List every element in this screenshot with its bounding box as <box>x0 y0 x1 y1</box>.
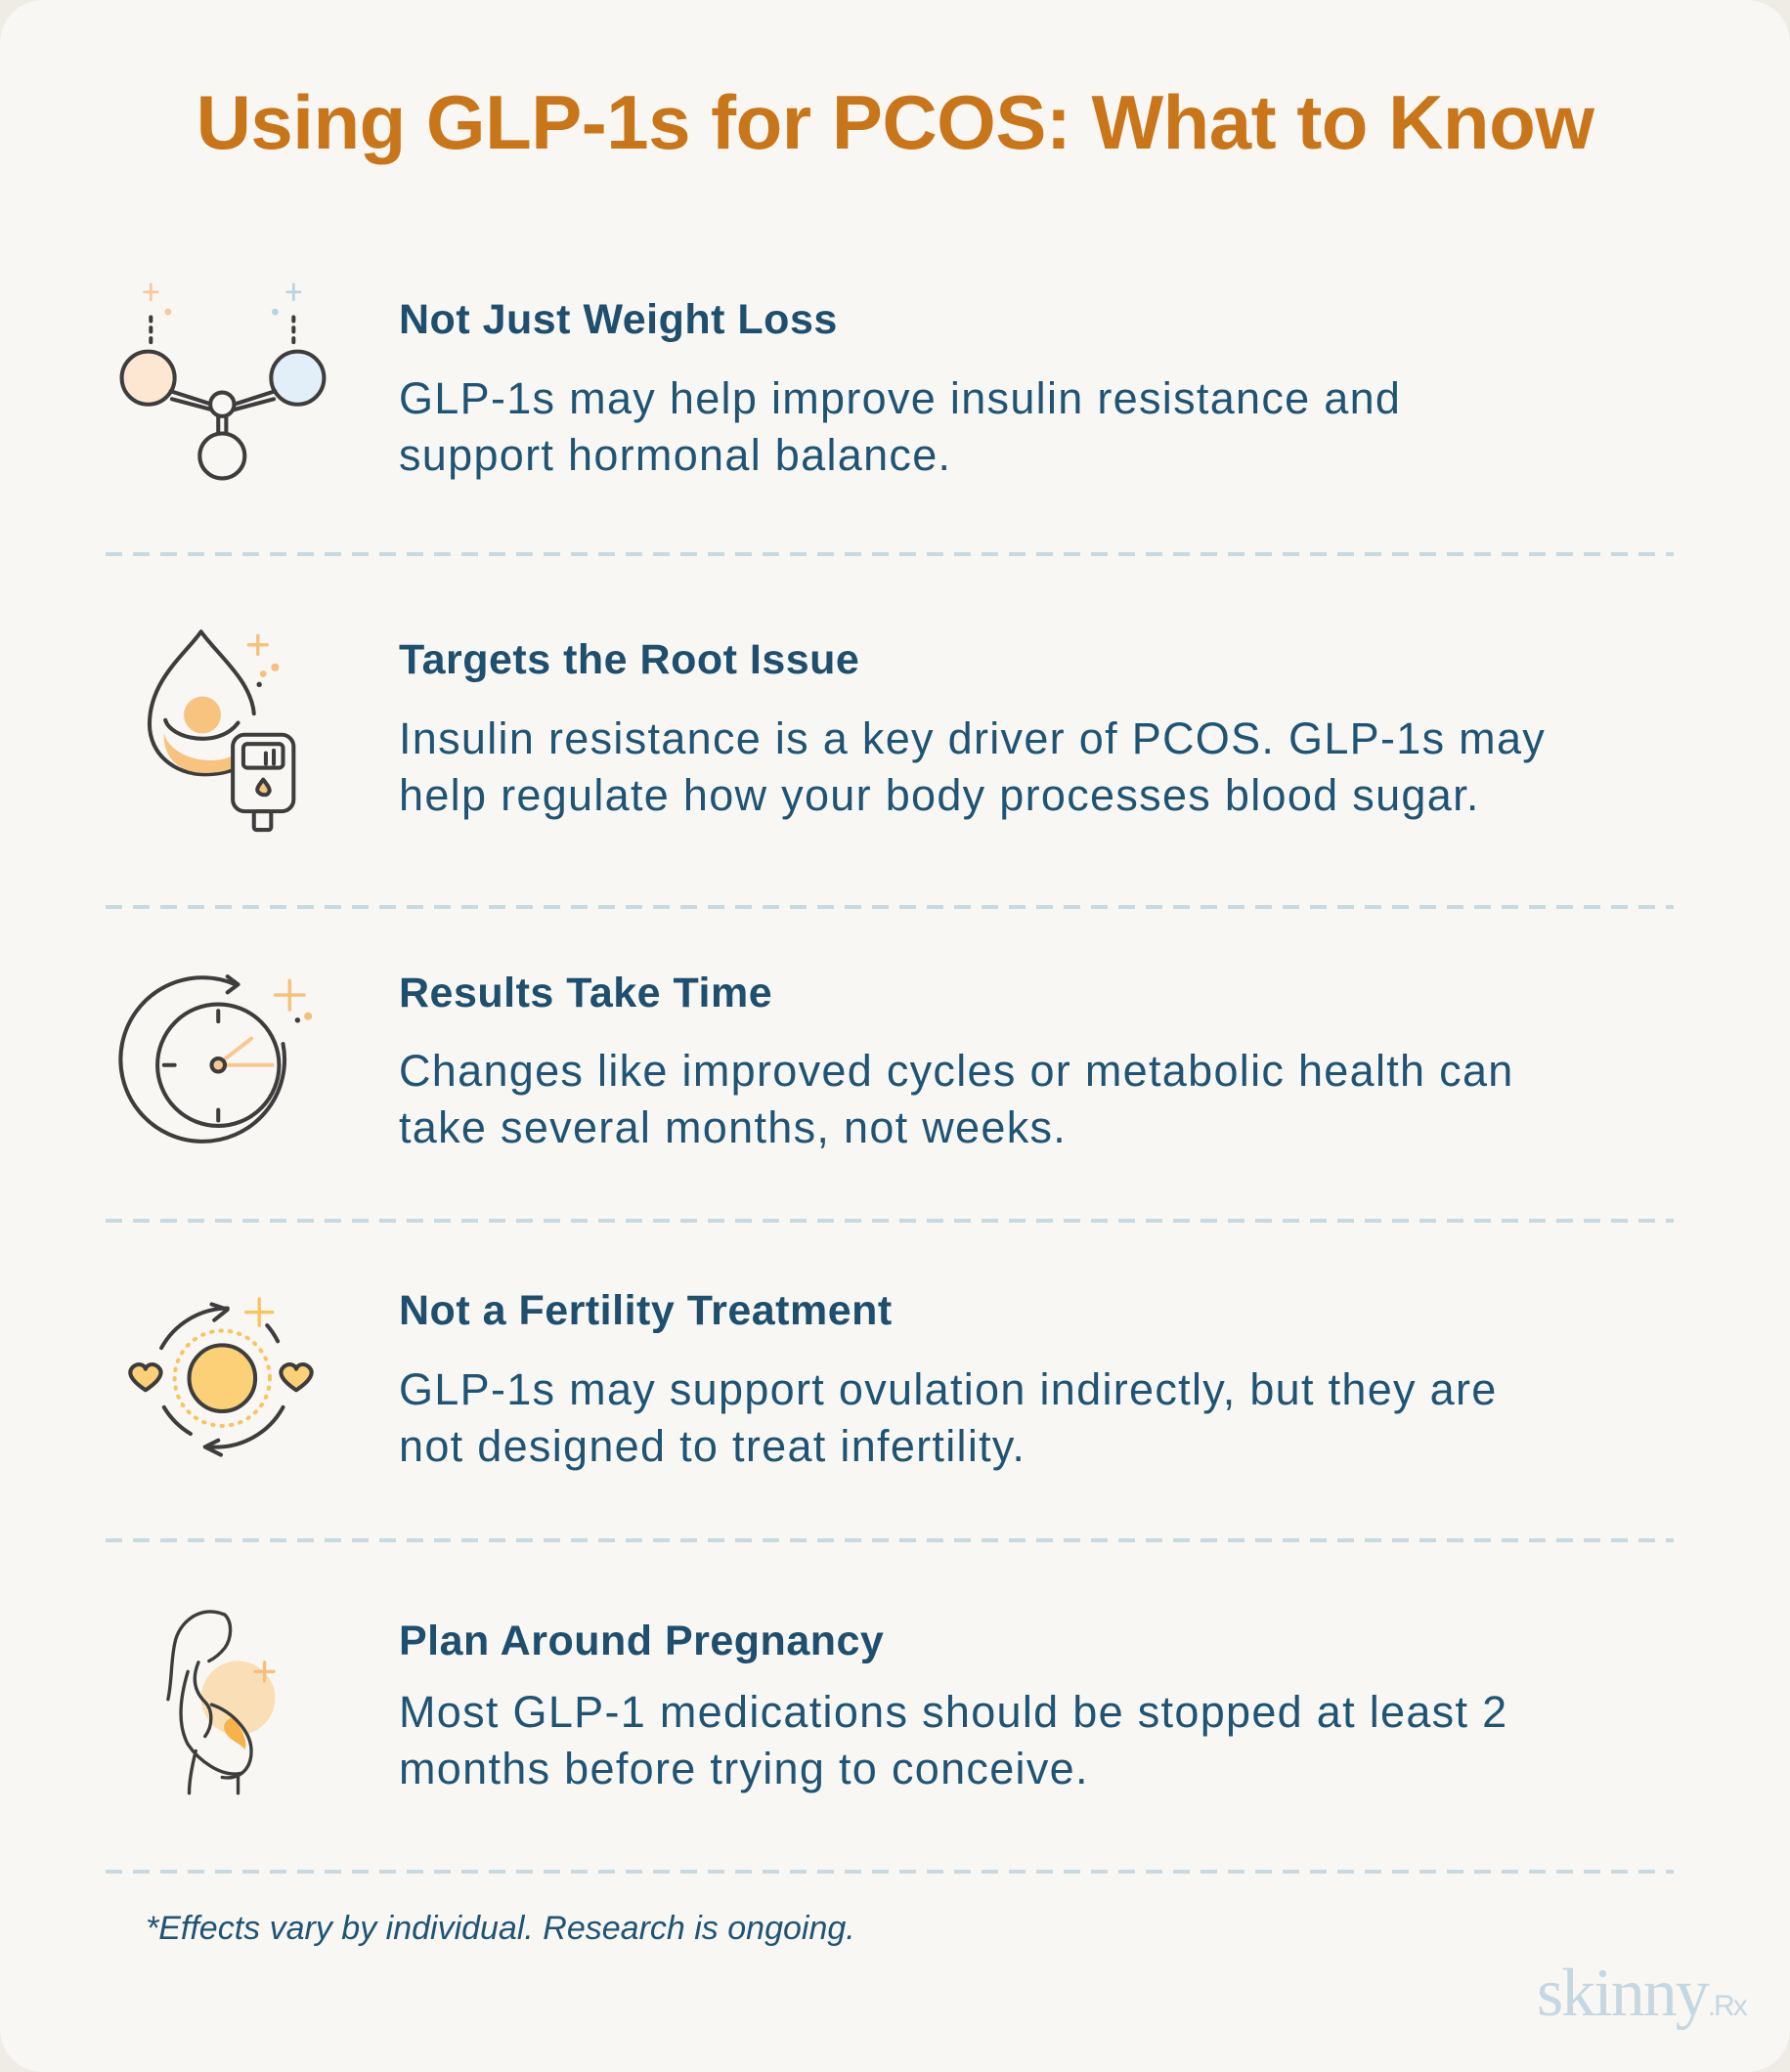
text: weight loss body: GLP-1s may help improve insulin resistance and <box>399 373 1401 423</box>
heading: root issue: Targets the Root Issue <box>399 636 859 683</box>
text: weight loss body: support hormonal balance. <box>399 430 951 480</box>
heading: results take time: Results Take Time <box>399 970 772 1016</box>
text: root issue body <box>399 713 1546 820</box>
icon: molecule <box>122 284 324 478</box>
text: results body <box>399 1046 1514 1152</box>
logo: skinny.Rx <box>1537 1956 1746 2031</box>
text: fertility body <box>399 1364 1498 1471</box>
heading: not fertility: Not a Fertility Treatment <box>399 1287 893 1334</box>
text: pregnancy body: months before trying to conceive. <box>399 1744 1089 1793</box>
footnote: *Effects vary by individual. Research is ongoing. <box>146 1910 855 1947</box>
icon: pregnant woman <box>168 1612 275 1793</box>
text: pregnancy body <box>399 1687 1507 1793</box>
text: fertility body: not designed to treat infertility. <box>399 1421 1026 1471</box>
icon: clock <box>120 976 312 1142</box>
heading: not just weight loss: Not Just Weight Loss <box>399 296 838 343</box>
text: fertility body: GLP-1s may support ovulation indirectly, but they are <box>399 1364 1498 1414</box>
text: root issue body: Insulin resistance is a key driver of PCOS. GLP-1s may <box>399 713 1546 763</box>
text: weight loss body <box>399 373 1401 480</box>
title: Using GLP-1s for PCOS: What to Know <box>196 79 1594 165</box>
heading: pregnancy: Plan Around Pregnancy <box>399 1618 884 1664</box>
text: results body: Changes like improved cycles or metabolic health can <box>399 1046 1514 1096</box>
text: pregnancy body: Most GLP-1 medications should be stopped at least 2 <box>399 1687 1507 1737</box>
text: results body: take several months, not weeks. <box>399 1102 1067 1152</box>
icon: blood drop and glucose meter <box>150 631 293 830</box>
text: root issue body: help regulate how your body processes blood sugar. <box>399 770 1480 820</box>
icon: ovulation cycle <box>130 1299 312 1455</box>
